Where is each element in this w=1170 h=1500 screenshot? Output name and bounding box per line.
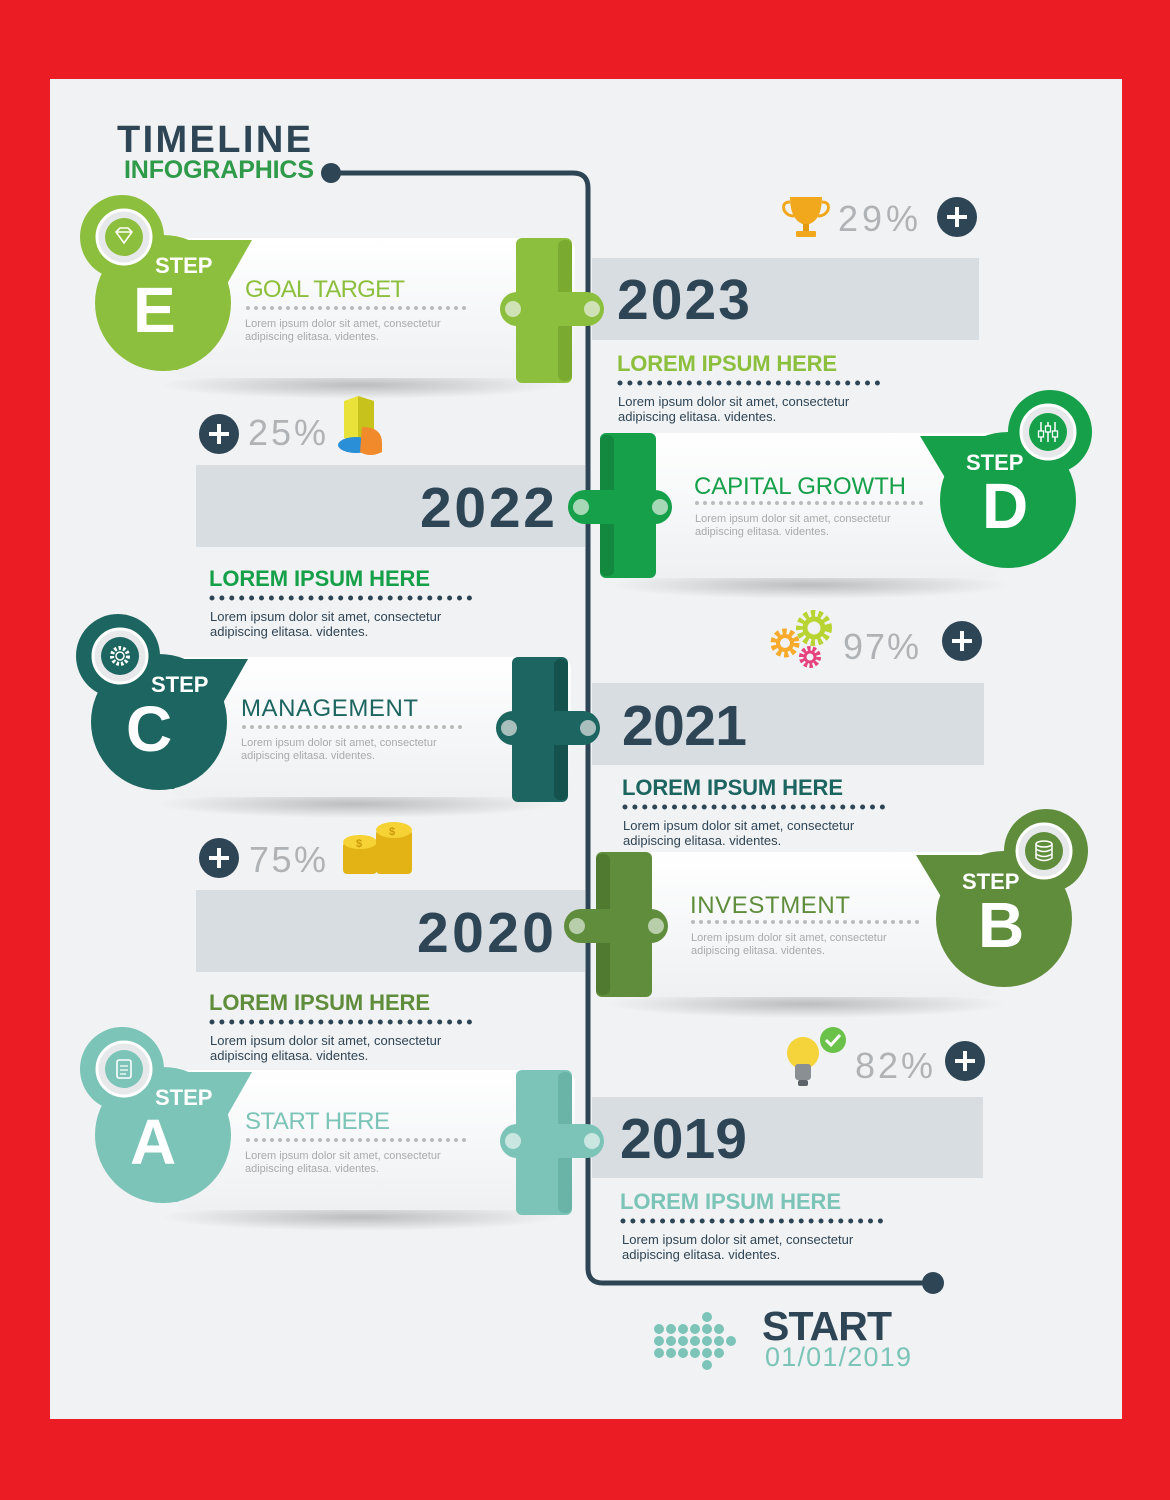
text block 2020: adipiscing elitasa. videntes. <box>210 1048 368 1063</box>
icon: plus <box>945 1041 985 1081</box>
text block 2021: LOREM IPSUM HERE <box>622 775 843 800</box>
icon: coins <box>343 822 412 874</box>
text block 2019: Lorem ipsum dolor sit amet, consectetur <box>622 1232 854 1247</box>
icon: clipboard <box>80 1027 164 1111</box>
panel: step B investment <box>564 809 1088 1018</box>
panel: step A start here: Lorem ipsum dolor sit amet, consectetur <box>245 1150 441 1162</box>
text block 2022 <box>209 566 470 639</box>
year bar 2021: 2021 <box>622 694 747 758</box>
connector <box>500 1070 604 1215</box>
panel: step C management: Lorem ipsum dolor sit amet, consectetur <box>241 737 437 749</box>
connector <box>496 657 600 802</box>
text block 2023: adipiscing elitasa. videntes. <box>618 409 776 424</box>
text block 2020 <box>209 990 470 1063</box>
text block 2022: LOREM IPSUM HERE <box>209 566 430 591</box>
panel: step A start here <box>80 1027 604 1231</box>
title: INFOGRAPHICS <box>124 156 314 184</box>
icon: sliders <box>1008 390 1092 474</box>
text block 2020: Lorem ipsum dolor sit amet, consectetur <box>210 1033 442 1048</box>
icon: plus <box>937 197 977 237</box>
panel: step E goal target: adipiscing elitasa. videntes. <box>245 331 379 343</box>
panel: step C management: adipiscing elitasa. videntes. <box>241 750 375 762</box>
stat: 29% trophy: 29% <box>838 198 918 239</box>
year bar 2022 <box>196 465 585 547</box>
panel: step B investment: INVESTMENT <box>690 892 850 919</box>
stat: 75% coins <box>199 822 412 880</box>
panel: step A start here: A <box>130 1106 176 1178</box>
icon: coins: $ <box>389 826 395 838</box>
text block 2020: LOREM IPSUM HERE <box>209 990 430 1015</box>
panel: step B investment: adipiscing elitasa. videntes. <box>691 945 825 957</box>
panel: step C management: STEP <box>151 672 208 697</box>
start block: START <box>762 1303 892 1349</box>
text block 2021: Lorem ipsum dolor sit amet, consectetur <box>623 818 855 833</box>
text block 2021 <box>622 775 883 848</box>
year bar 2021 <box>592 683 984 765</box>
stat: 97% gears: 97% <box>843 626 919 667</box>
icon: plus <box>199 838 239 878</box>
connector <box>568 433 672 578</box>
stat: 75% coins: 75% <box>249 839 326 880</box>
start block: 01/01/2019 <box>765 1342 911 1372</box>
panel: step D capital growth <box>568 390 1092 599</box>
panel: step E goal target: STEP <box>155 253 212 278</box>
year bar 2020 <box>196 890 585 972</box>
icon: coins: $ <box>356 838 362 850</box>
title: TIMELINE <box>117 119 311 161</box>
start block <box>654 1303 911 1372</box>
text block 2022: Lorem ipsum dolor sit amet, consectetur <box>210 609 442 624</box>
stat: 25% chart: 25% <box>248 412 326 453</box>
panel: step B investment: Lorem ipsum dolor sit amet, consectetur <box>691 932 887 944</box>
icon: gear <box>76 614 160 698</box>
text block 2019: LOREM IPSUM HERE <box>620 1189 841 1214</box>
panel: step A start here: STEP <box>155 1085 212 1110</box>
timeline line <box>321 163 944 1294</box>
stat: 25% chart <box>199 396 382 455</box>
panel: step D capital growth: adipiscing elitasa. videntes. <box>695 526 829 538</box>
panel: step D capital growth: D <box>982 470 1028 542</box>
text block 2023 <box>617 351 878 424</box>
connector <box>564 852 668 997</box>
text block 2023: LOREM IPSUM HERE <box>617 351 837 376</box>
title <box>117 119 314 184</box>
icon: dotted arrow <box>654 1312 736 1370</box>
panel: step C management <box>76 614 600 818</box>
icon: database <box>1004 809 1088 893</box>
panel: step A start here: adipiscing elitasa. videntes. <box>245 1163 379 1175</box>
panel: step C management: MANAGEMENT <box>241 695 418 722</box>
text block 2021: adipiscing elitasa. videntes. <box>623 833 781 848</box>
icon: gears <box>774 614 828 665</box>
panel: step E goal target <box>80 195 604 399</box>
year bar 2019 <box>592 1097 983 1178</box>
icon: bulb <box>787 1027 846 1086</box>
stat: 29% trophy <box>784 197 977 239</box>
text block 2019 <box>620 1189 881 1262</box>
panel: step E goal target: Lorem ipsum dolor sit amet, consectetur <box>245 318 441 330</box>
panel: step C management: C <box>126 693 172 765</box>
panel: step D capital growth: Lorem ipsum dolor sit amet, consectetur <box>695 513 891 525</box>
text block 2023: Lorem ipsum dolor sit amet, consectetur <box>618 394 850 409</box>
stat: 97% gears <box>774 614 982 667</box>
icon: diamond <box>80 195 164 279</box>
icon: trophy <box>784 197 828 237</box>
year bar 2019: 2019 <box>620 1107 747 1171</box>
panel: step E goal target: GOAL TARGET <box>245 276 405 303</box>
panel: step E goal target: E <box>133 274 176 346</box>
year bar 2020: 2020 <box>417 901 554 965</box>
text block 2022: adipiscing elitasa. videntes. <box>210 624 368 639</box>
icon: plus <box>942 621 982 661</box>
panel: step A start here: START HERE <box>245 1108 390 1135</box>
year bar 2022: 2022 <box>420 476 555 540</box>
icon: 3d chart <box>338 396 382 455</box>
panel: step D capital growth: CAPITAL GROWTH <box>694 473 906 500</box>
panel: step B investment: B <box>978 889 1024 961</box>
panel: step D capital growth: STEP <box>966 450 1023 475</box>
stat: 82% bulb <box>787 1027 985 1086</box>
stat: 82% bulb: 82% <box>855 1045 933 1086</box>
text block 2019: adipiscing elitasa. videntes. <box>622 1247 780 1262</box>
connector <box>500 238 604 383</box>
panel: step B investment: STEP <box>962 869 1019 894</box>
year bar 2023: 2023 <box>617 268 750 332</box>
icon: plus <box>199 414 239 454</box>
year bar 2023 <box>592 258 979 340</box>
